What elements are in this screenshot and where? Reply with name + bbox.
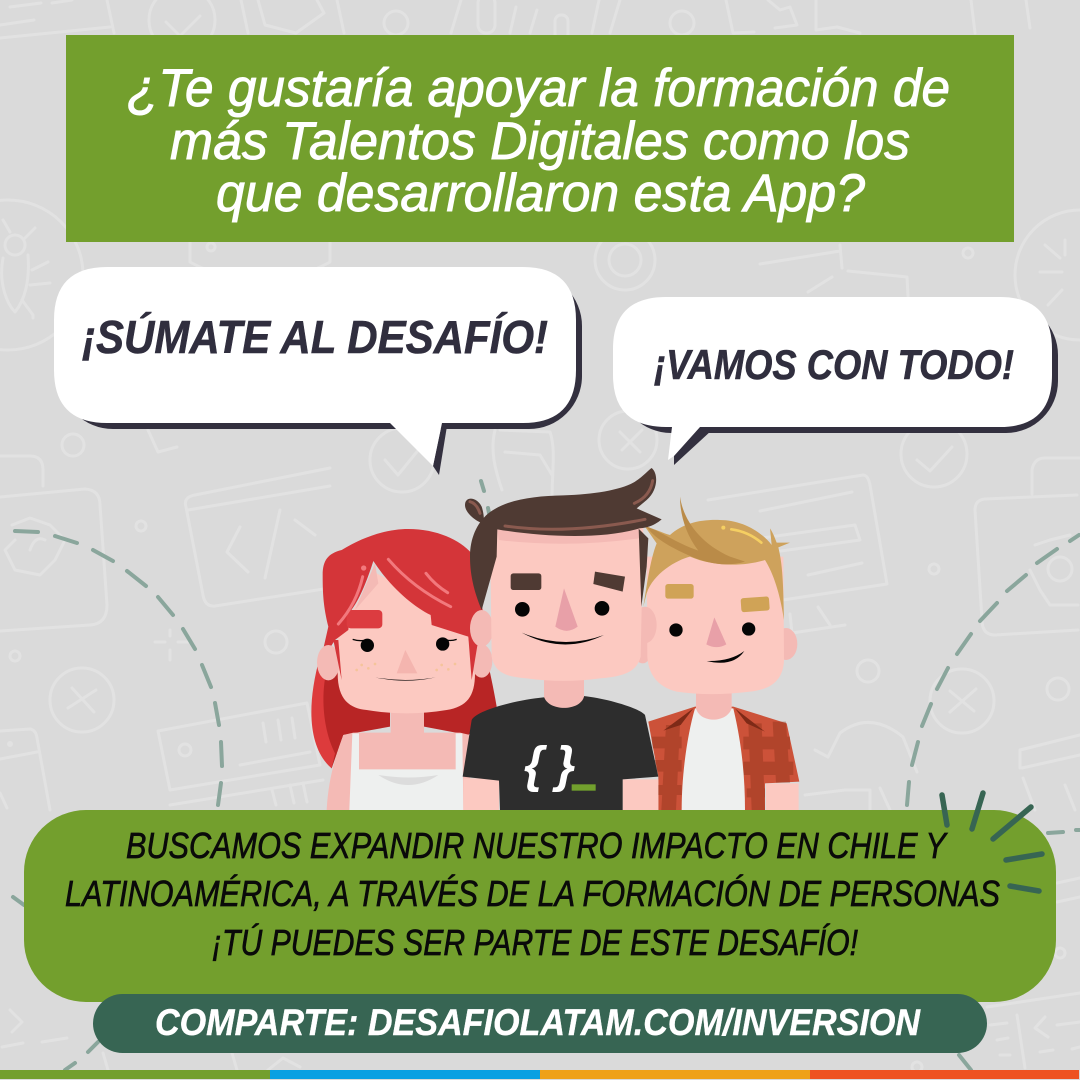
title line 2: más Talentos Digitales como los xyxy=(170,112,910,171)
title banner xyxy=(66,35,1014,242)
illustration: three characters xyxy=(311,468,799,810)
character: central man with code t-shirt xyxy=(463,468,662,810)
t-shirt logo xyxy=(524,737,596,793)
character: red-haired woman xyxy=(311,529,497,810)
speech bubble: súmate al desafío xyxy=(54,267,582,475)
panel text line 3: ¡TÚ PUEDES SER PARTE DE ESTE DESAFÍO! xyxy=(212,922,858,963)
speech bubble: vamos con todo xyxy=(613,297,1058,465)
share link pill xyxy=(93,994,987,1053)
bubble text: ¡SÚMATE AL DESAFÍO! xyxy=(82,311,548,363)
share link text: COMPARTE: DESAFIOLATAM.COM/INVERSION xyxy=(155,1002,921,1043)
title line 1: ¿Te gustaría apoyar la formación de xyxy=(127,59,950,118)
character: blond man xyxy=(633,497,799,810)
panel text line 1: BUSCAMOS EXPANDIR NUESTRO IMPACTO EN CHILE Y xyxy=(126,825,949,866)
t-shirt logo: { xyxy=(524,737,547,793)
t-shirt logo: } xyxy=(552,737,575,793)
impact message panel xyxy=(24,810,1056,1002)
title line 3: que desarrollaron esta App? xyxy=(216,164,865,223)
dashed decorative arcs xyxy=(13,481,1080,1070)
icon: burst rays xyxy=(942,793,1042,891)
bubble text: ¡VAMOS CON TODO! xyxy=(654,341,1014,388)
brand colour strip xyxy=(0,1070,1079,1079)
